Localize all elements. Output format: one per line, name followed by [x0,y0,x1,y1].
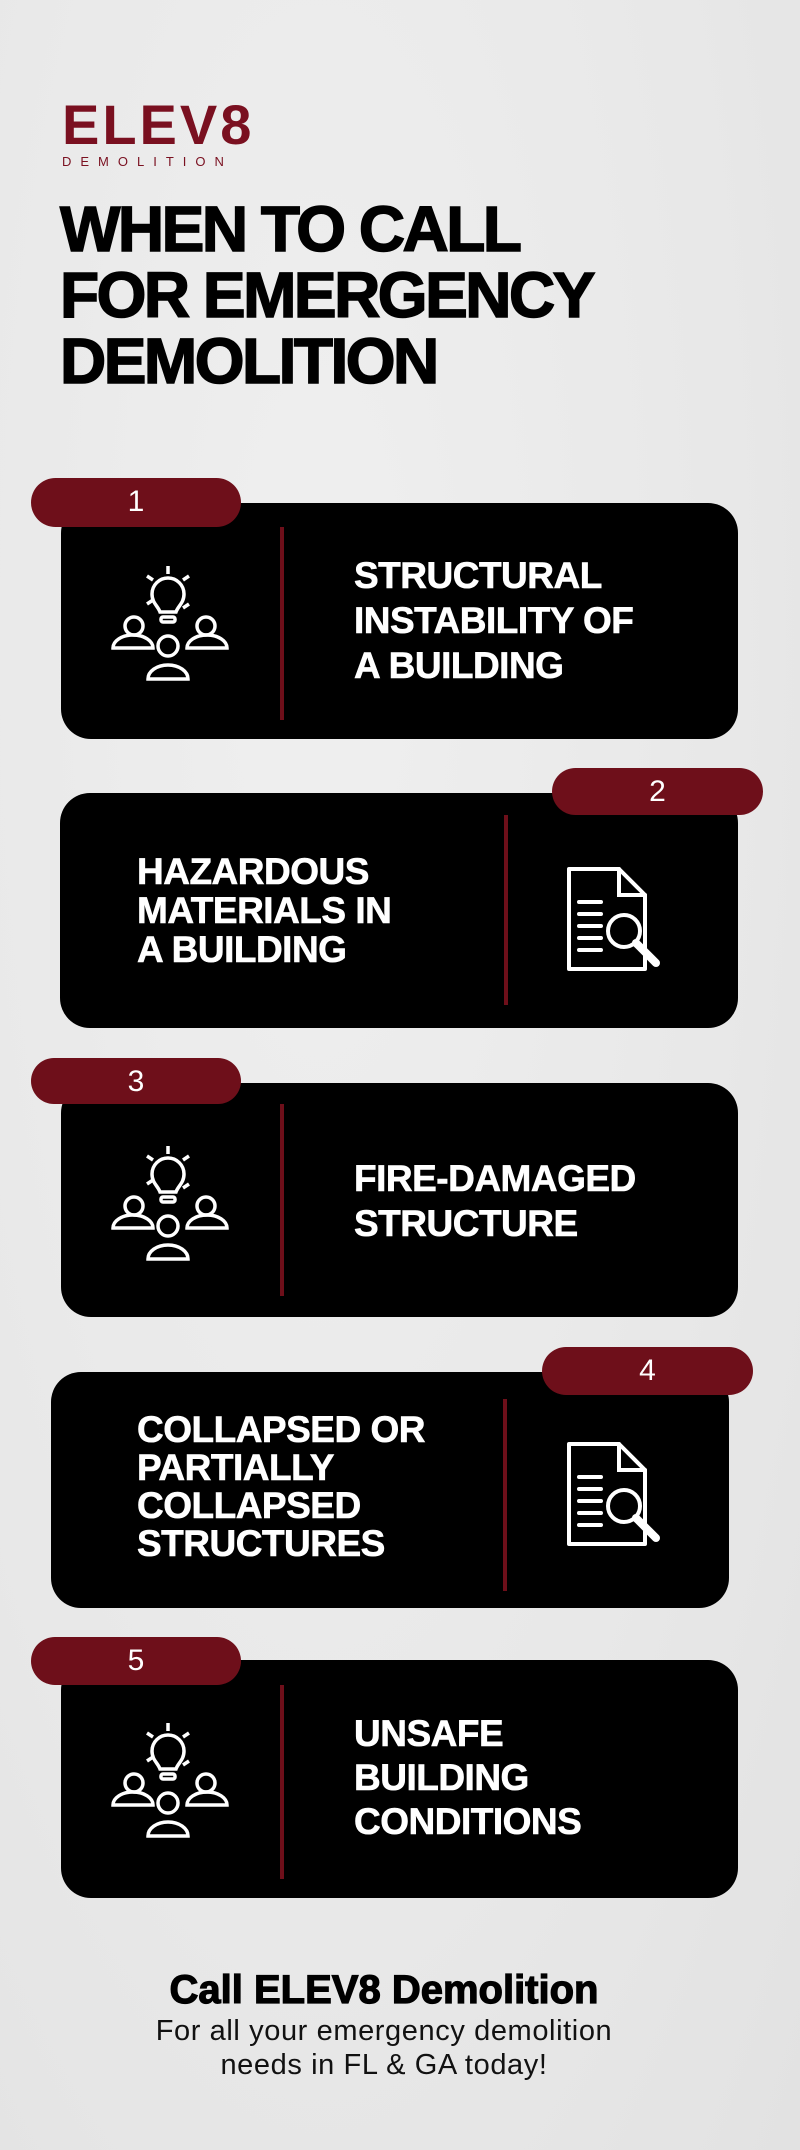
text: STRUCTURE [354,1203,578,1244]
number pill 2: 2 [649,775,666,808]
panel: card 3 [31,1058,738,1317]
text: STRUCTURES [137,1523,385,1564]
number pill 5: 5 [128,1644,144,1677]
text: FIRE-DAMAGED [354,1158,636,1199]
title: DEMOLITION [60,325,437,397]
number pill 4: 4 [639,1354,656,1387]
text: CONDITIONS [354,1801,581,1842]
icon: document search [567,1442,660,1546]
text: BUILDING [354,1757,529,1798]
text: PARTIALLY [137,1447,334,1488]
title: WHEN TO CALL [60,193,519,265]
panel: card 4 [51,1347,753,1608]
text: COLLAPSED [137,1485,361,1526]
number pill 1: 1 [128,485,144,518]
text [354,1158,636,1244]
title [59,193,596,397]
icon: bulb people [111,1723,229,1838]
icon: document search [567,867,660,971]
number pill 4 [542,1347,753,1395]
text [354,1713,581,1842]
text: COLLAPSED OR [137,1409,425,1450]
icon: bulb people [111,1146,229,1261]
text [137,1409,426,1564]
footer call to action [156,1968,612,2081]
number pill 5 [31,1637,241,1685]
text: A BUILDING [137,929,346,970]
text [354,555,633,686]
text [137,851,391,970]
text: MATERIALS IN [137,890,391,931]
text: INSTABILITY OF [354,600,633,641]
number pill 1 [31,478,241,527]
panel: card 5 [31,1637,738,1898]
footer call to action: needs in FL & GA today! [220,2049,548,2081]
logo: DEMOLITION [62,154,233,169]
title: FOR EMERGENCY [60,259,593,331]
icon: bulb people [111,566,229,681]
number pill 2 [552,768,763,815]
text: STRUCTURAL [354,555,602,596]
text: A BUILDING [354,645,563,686]
panel: card 1 [31,478,738,739]
text: HAZARDOUS [137,851,369,892]
text: UNSAFE [354,1713,503,1754]
footer call to action: For all your emergency demolition [156,2015,612,2047]
number pill 3 [31,1058,241,1104]
panel: card 2 [60,768,763,1028]
logo: ELEV8 [62,93,254,156]
number pill 3: 3 [128,1065,144,1098]
footer call to action: Call ELEV8 Demolition [170,1968,598,2012]
